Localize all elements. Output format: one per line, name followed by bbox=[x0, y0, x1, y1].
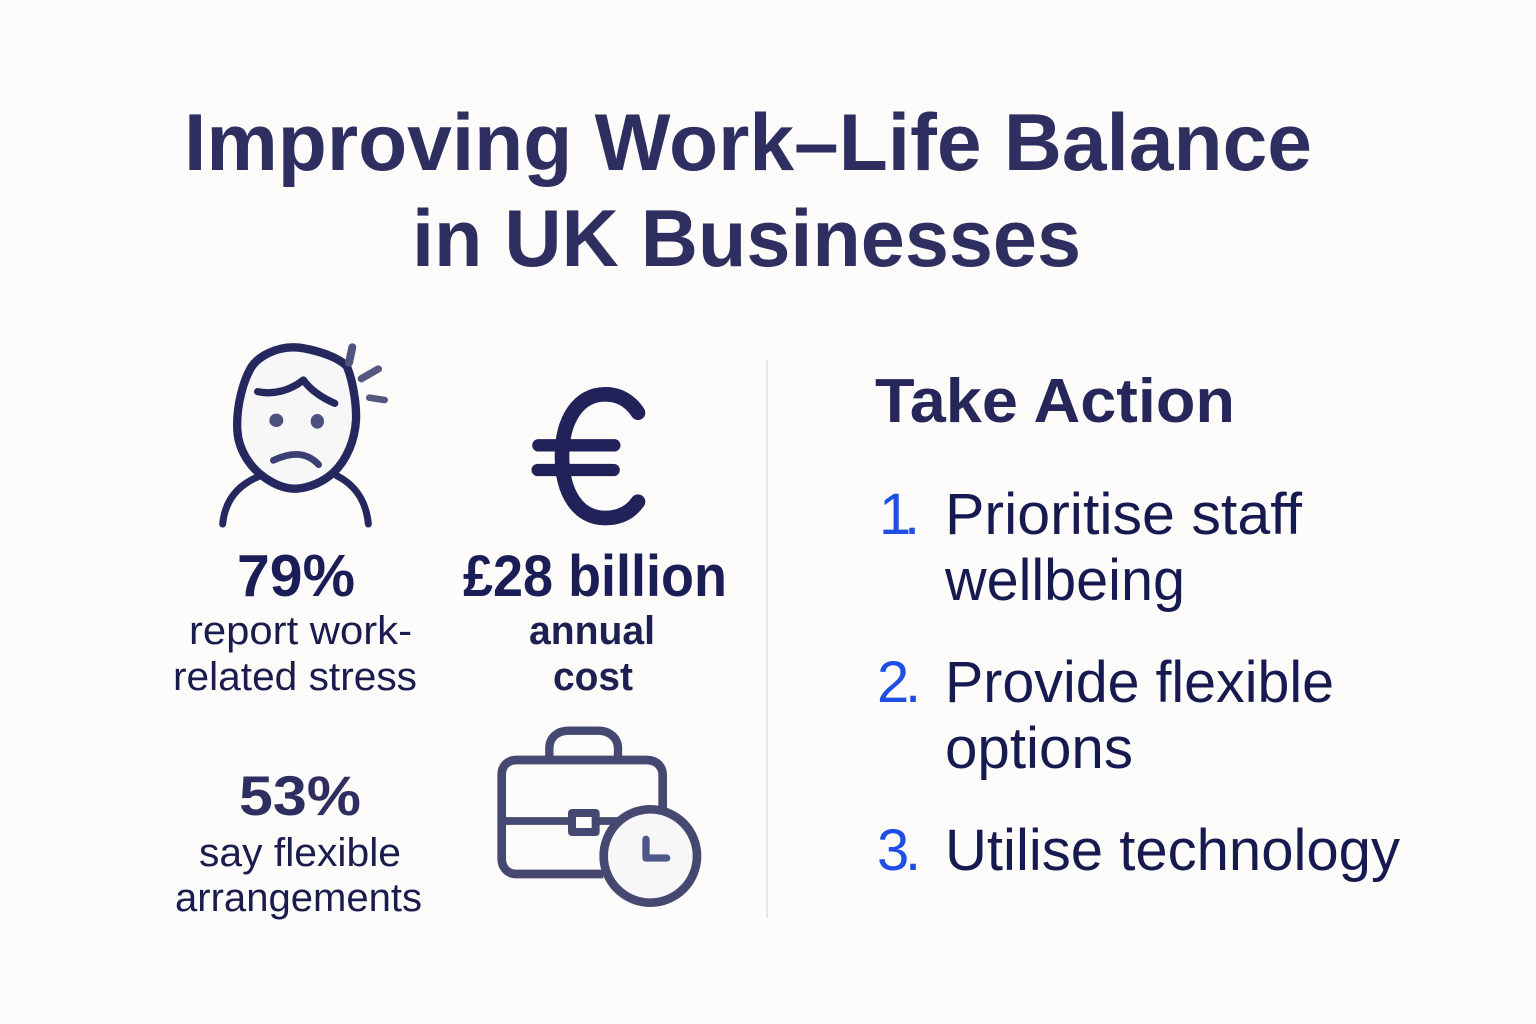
title: in UK Businesses bbox=[412, 194, 1081, 284]
action item 1 bbox=[879, 482, 1303, 613]
title bbox=[184, 98, 1312, 284]
stat value: 79%: 79% bbox=[237, 543, 355, 609]
stat label: report work-related stress: related stress bbox=[173, 655, 417, 699]
title: Improving Work–Life Balance bbox=[184, 98, 1312, 188]
action item 2: 2. bbox=[877, 650, 921, 715]
stat value: £28 billion: £28 billion bbox=[463, 544, 727, 609]
stat label: report work-related stress bbox=[173, 609, 417, 699]
stat label: say flexible arrangements: say flexible bbox=[199, 831, 401, 875]
icon: briefcase with clock bbox=[502, 731, 697, 903]
heading: take action: Take Action bbox=[875, 367, 1235, 436]
action item 3: Utilise technology bbox=[945, 818, 1400, 883]
stat label: report work-related stress: report work- bbox=[189, 609, 412, 653]
action item 2 bbox=[877, 650, 1334, 781]
stat: annual cost bbox=[463, 394, 727, 699]
stat: flexible arrangements bbox=[175, 731, 697, 920]
stat label: annual cost: annual bbox=[529, 609, 655, 653]
action item 1: wellbeing bbox=[944, 548, 1185, 613]
stat label: say flexible arrangements bbox=[175, 831, 422, 920]
action item 1: Prioritise staff bbox=[945, 482, 1303, 547]
action item 2: Provide flexible bbox=[945, 650, 1334, 715]
stat label: annual cost: cost bbox=[553, 655, 633, 699]
icon: stressed face bbox=[223, 347, 385, 524]
action item 2: options bbox=[945, 716, 1133, 781]
action item 1: 1. bbox=[879, 482, 920, 547]
stat: work-related stress bbox=[173, 347, 417, 699]
icon: euro sign bbox=[538, 394, 638, 518]
stat value: 53%: 53% bbox=[239, 764, 361, 827]
action item 3: 3. bbox=[877, 818, 921, 883]
stat label: annual cost bbox=[529, 609, 655, 699]
panel: take action bbox=[875, 367, 1400, 883]
stat label: say flexible arrangements: arrangements bbox=[175, 876, 422, 920]
divider bbox=[766, 360, 768, 918]
panel: statistics bbox=[173, 347, 727, 920]
